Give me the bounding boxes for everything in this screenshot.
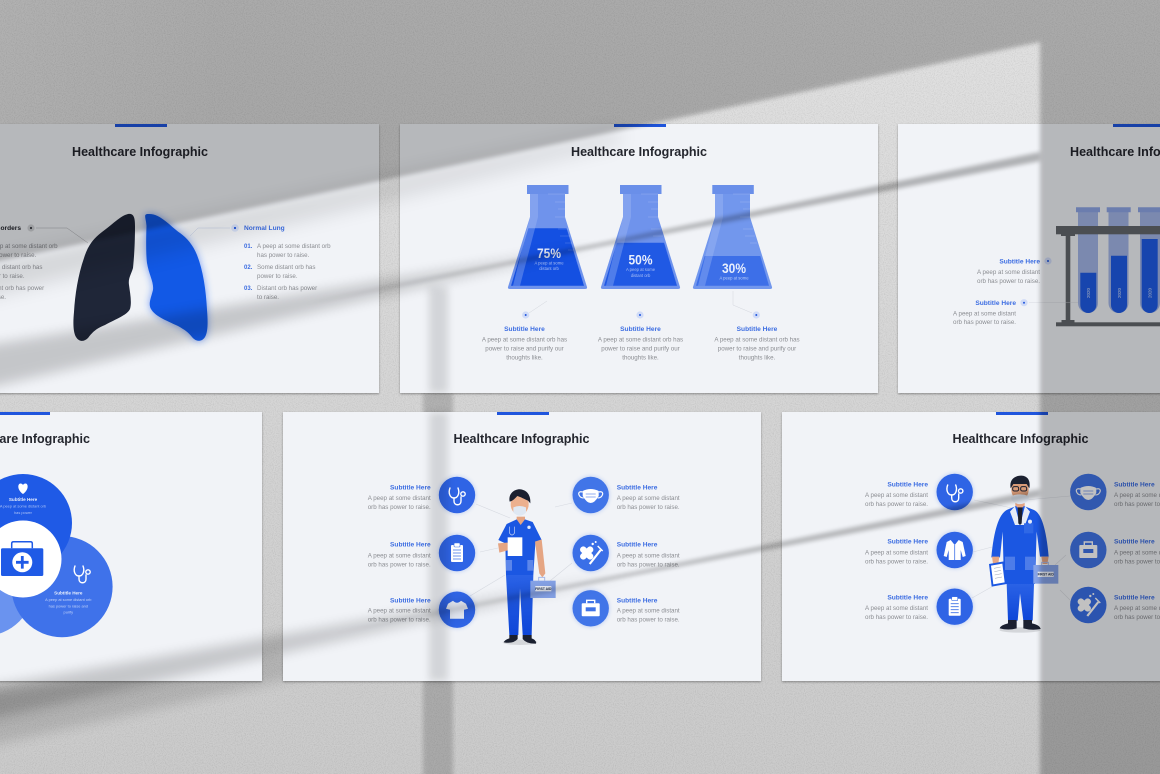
item: stethoscope: Subtitle Here <box>390 484 431 491</box>
item: clipboard <box>368 534 476 572</box>
panel: doctor slide <box>782 412 1160 681</box>
caption: flask 3 <box>714 291 800 362</box>
panel: nurse slide <box>283 412 761 681</box>
item: stethoscope: A peep at some distant <box>865 492 928 499</box>
test tube rack <box>1056 207 1160 326</box>
item: lab coat: Subtitle Here <box>887 539 928 546</box>
caption: flask 3: Subtitle Here <box>737 326 778 333</box>
item: stethoscope: orb has power to raise. <box>368 504 431 511</box>
item: first aid case <box>572 590 680 627</box>
text: right circle: purify <box>64 609 73 614</box>
callout: normal lung: Normal Lung <box>244 225 285 232</box>
callout: normal lung: A peep at some distant orb <box>257 243 331 250</box>
caption: flask 3: power to raise and purify our <box>718 346 796 352</box>
flask 50%: A peep at some <box>626 267 656 272</box>
doctor illustration: FIRST AID <box>1038 573 1054 577</box>
test tube rack: 2020 <box>1117 287 1122 298</box>
callout: normal lung: Some distant orb has <box>257 264 315 271</box>
text: right circle: Subtitle Here <box>54 590 83 595</box>
item: bandage and syringe: Subtitle Here <box>617 542 658 549</box>
item: stethoscope <box>368 476 476 514</box>
flask 30%: A peep at some <box>719 276 749 280</box>
caption: flask 2 <box>598 311 683 362</box>
callout: tube 2: A peep at some distant <box>953 310 1016 318</box>
item: mask: A peep at some distant <box>617 495 680 502</box>
title: Healthcare Infographic <box>454 432 590 446</box>
callout: tube 2 <box>953 299 1078 326</box>
item: lab coat <box>865 532 973 568</box>
item: first aid case <box>1070 532 1160 568</box>
flask 50% <box>601 185 680 289</box>
nurse illustration <box>498 489 556 645</box>
item: clipboard: A peep at some distant <box>368 552 431 559</box>
caption: flask 3: A peep at some distant orb has <box>714 336 800 344</box>
item: clipboard: orb has power to raise. <box>368 561 431 568</box>
text: right circle: A peep at some distant orb <box>45 597 91 602</box>
item: lab coat: orb has power to raise. <box>865 558 928 565</box>
panel: venn slide <box>0 412 262 681</box>
flask 75%: A peep at some <box>534 260 564 266</box>
item: first aid case: A peep at some distant <box>617 608 680 615</box>
flask 30%: 30% <box>722 261 746 276</box>
test tube rack: 2020 <box>1086 287 1091 298</box>
title: Healthcare Infographic <box>952 432 1089 446</box>
panel: test tube slide <box>898 124 1160 393</box>
callout: normal lung: Distant orb has power <box>257 285 317 292</box>
item: lab coat: A peep at some distant <box>865 549 928 556</box>
panel: lung slide <box>0 124 379 393</box>
doctor illustration <box>989 476 1058 633</box>
venn diagram <box>0 474 113 637</box>
icon: heart <box>18 484 28 494</box>
text: top circle <box>0 497 46 515</box>
callout: tube 2: Subtitle Here <box>975 300 1016 307</box>
callout: tube 1 <box>977 257 1052 285</box>
title: Healthcare Infographic <box>72 145 208 159</box>
flask 50%: distant orb <box>631 273 651 278</box>
item: mask: Subtitle Here <box>1114 481 1155 488</box>
caption: flask 1: A peep at some distant orb has <box>482 336 567 344</box>
flask 75% <box>508 185 587 289</box>
caption: flask 1: Subtitle Here <box>504 326 545 333</box>
caption: flask 2: A peep at some distant orb has <box>598 336 683 344</box>
item: clipboard: orb has power to raise. <box>865 614 928 621</box>
text: right circle <box>45 590 91 614</box>
item: stethoscope: orb has power to raise. <box>865 501 928 508</box>
icon: stethoscope <box>74 566 90 583</box>
item: mask: Subtitle Here <box>617 484 658 491</box>
flask 30% <box>693 185 772 289</box>
callout: normal lung: has power to raise. <box>257 252 310 259</box>
item: mask <box>1070 474 1160 510</box>
item: stethoscope: Subtitle Here <box>887 481 928 488</box>
item: shirt: orb has power to raise. <box>368 617 431 624</box>
nurse illustration: FIRST AID <box>535 587 552 591</box>
connector lines <box>972 496 1070 600</box>
item: first aid case: Subtitle Here <box>617 597 658 604</box>
item: clipboard: A peep at some distant <box>865 605 928 612</box>
item: bandage and syringe: Subtitle Here <box>1114 594 1155 601</box>
text: right circle: has power to raise and <box>49 603 88 608</box>
caption: flask 1 <box>482 301 567 362</box>
item: bandage and syringe <box>572 534 680 572</box>
caption: flask 1: power to raise and purify our <box>485 346 564 352</box>
flask 75%: distant orb <box>539 266 559 271</box>
item: bandage and syringe: orb has power to raise. <box>617 561 680 568</box>
panel: flask slide <box>400 124 878 393</box>
callout: tube 1: orb has power to raise. <box>977 278 1040 285</box>
caption: flask 2: Subtitle Here <box>620 326 661 333</box>
item: mask: orb has power to raise. <box>617 504 680 511</box>
caption: flask 2: thoughts like. <box>622 354 659 362</box>
caption: flask 3: thoughts like. <box>739 354 776 362</box>
callout: normal lung <box>190 224 331 301</box>
caption: flask 1: thoughts like. <box>506 354 543 362</box>
lungs illustration <box>73 214 208 341</box>
item: mask <box>572 476 680 514</box>
item: first aid case: Subtitle Here <box>1114 539 1155 546</box>
connector lines <box>470 503 572 596</box>
callout: normal lung: 02. <box>244 265 253 271</box>
item: clipboard <box>865 588 973 625</box>
item: shirt: A peep at some distant <box>368 608 431 615</box>
callout: lung disorders <box>0 224 88 301</box>
callout: normal lung: 01. <box>244 244 253 250</box>
item: stethoscope <box>865 474 973 510</box>
item: bandage and syringe: A peep at some distant <box>617 552 680 559</box>
flask 75%: 75% <box>537 246 561 261</box>
callout: tube 2: orb has power to raise. <box>953 319 1016 326</box>
callout: normal lung: to raise. <box>257 294 279 301</box>
item: first aid case: orb has power to raise. <box>617 617 680 624</box>
test tube rack: 2020 <box>1148 287 1152 298</box>
title: Healthcare Infographic <box>571 145 707 159</box>
item: clipboard: Subtitle Here <box>390 542 431 549</box>
callout: tube 1: Subtitle Here <box>999 258 1040 266</box>
callout: normal lung: power to raise. <box>257 273 298 280</box>
item: stethoscope: A peep at some distant <box>368 495 431 502</box>
text: top circle: Subtitle Here <box>9 497 38 502</box>
flask 50%: 50% <box>628 252 652 268</box>
item: clipboard: Subtitle Here <box>887 594 928 601</box>
text: top circle: A peep at some distant orb <box>0 504 46 508</box>
item: bandage and syringe <box>1070 587 1160 623</box>
text: top circle: has power <box>14 510 33 515</box>
callout: normal lung: 03. <box>244 286 253 292</box>
item: shirt <box>368 591 476 628</box>
caption: flask 2: power to raise and purify our <box>601 346 680 352</box>
item: shirt: Subtitle Here <box>390 597 431 604</box>
callout: tube 1: A peep at some distant <box>977 269 1040 276</box>
icon: first aid kit <box>1 542 43 576</box>
